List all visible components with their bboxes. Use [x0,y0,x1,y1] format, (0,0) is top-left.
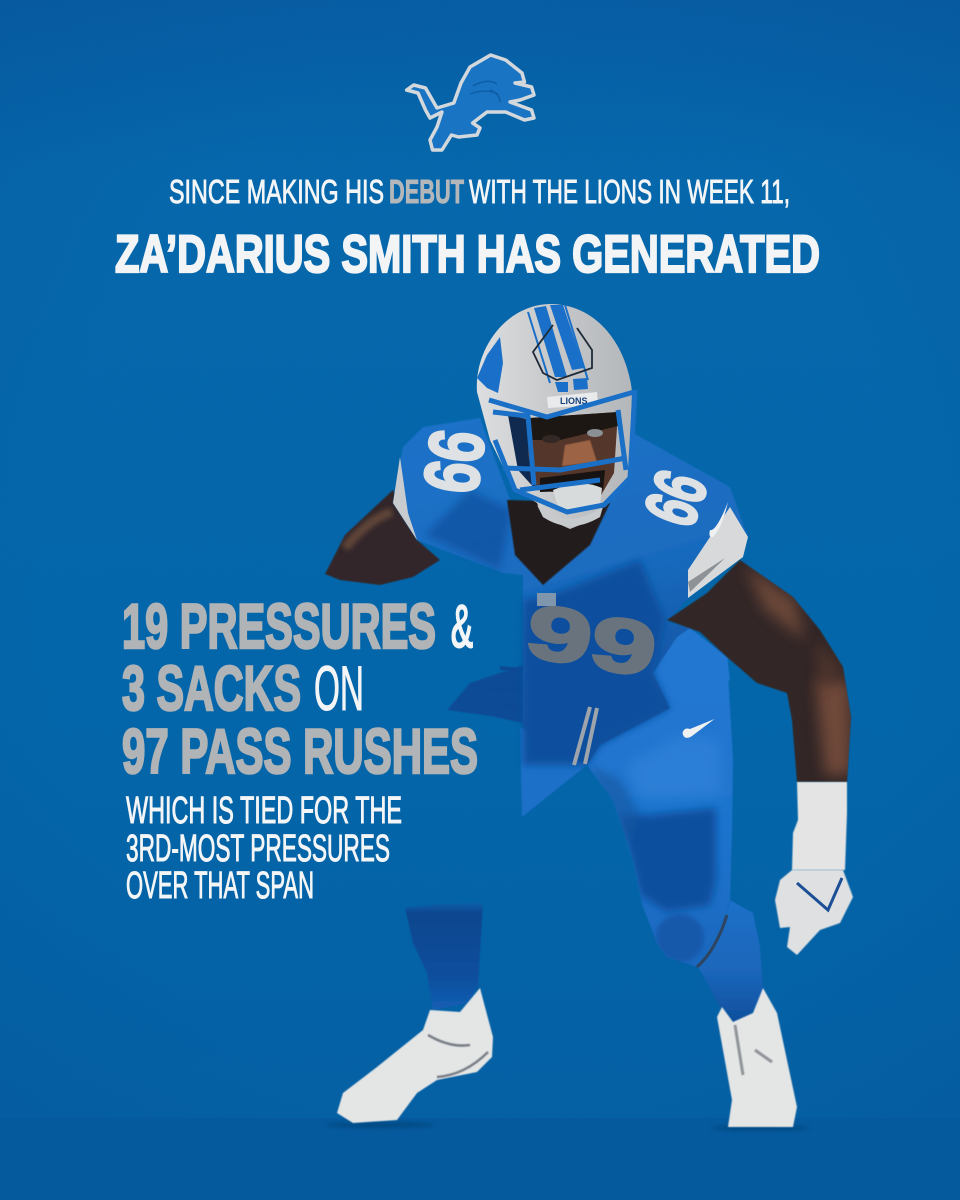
stats headline [122,592,478,787]
line 1: 19 PRESSURES [122,592,436,662]
helmet [477,304,635,529]
supporting text [126,790,402,907]
supporting text: OVER THAT SPAN [126,865,314,907]
helmet interior [508,415,536,490]
dark fold chest [523,560,670,765]
right arm [667,560,852,782]
left arm [325,490,440,585]
LIONS plate: LIONS [560,396,588,406]
left lower leg [405,903,483,1010]
brush streaks [490,668,523,708]
right sleeve stripe [688,507,748,598]
left pants piece [520,727,587,817]
player illustration [325,304,853,1130]
NFL shield [537,593,556,606]
helmet hex outline [533,325,592,380]
subtitle line [169,174,790,211]
jersey [393,418,748,765]
line 1: & [450,592,474,662]
supporting text: 3RD-MOST PRESSURES [126,828,390,870]
icon: Lions logo [407,55,534,150]
jersey shadow left [425,490,512,570]
wrist tape [792,782,847,870]
thigh fragment [447,665,523,723]
left shoe [337,988,493,1123]
right thigh [587,657,733,967]
left sleeve stripe [393,457,417,540]
LIONS plate [547,392,598,408]
knee strap [697,915,727,967]
face [528,412,618,497]
helmet lion decal [477,337,503,393]
chin cup [537,505,602,526]
right shoe [717,988,797,1127]
facemask [489,390,635,512]
right lower leg [697,900,763,1022]
subtitle line: DEBUT [389,174,464,211]
glove [775,870,853,955]
neck [507,500,610,585]
drawstring [574,707,597,765]
jersey swoosh [709,502,728,537]
helmet stripes [528,305,588,392]
line 3: 97 PASS RUSHES [122,717,478,787]
mouthguard [553,483,602,510]
jersey tail [653,628,730,708]
line 2: 3 SACKS [122,654,301,724]
subtitle line: SINCE MAKING HIS [169,174,384,211]
line 2: ON [314,654,364,724]
ground shadows [325,1122,810,1130]
jersey number left shoulder: 99 [407,425,502,498]
subtitle line: WITH THE LIONS IN WEEK 11, [469,174,790,211]
jersey number right shoulder: 99 [628,461,724,536]
supporting text: WHICH IS TIED FOR THE [126,790,402,832]
pants swoosh [682,719,714,738]
jersey number chest: 99 [520,588,663,694]
